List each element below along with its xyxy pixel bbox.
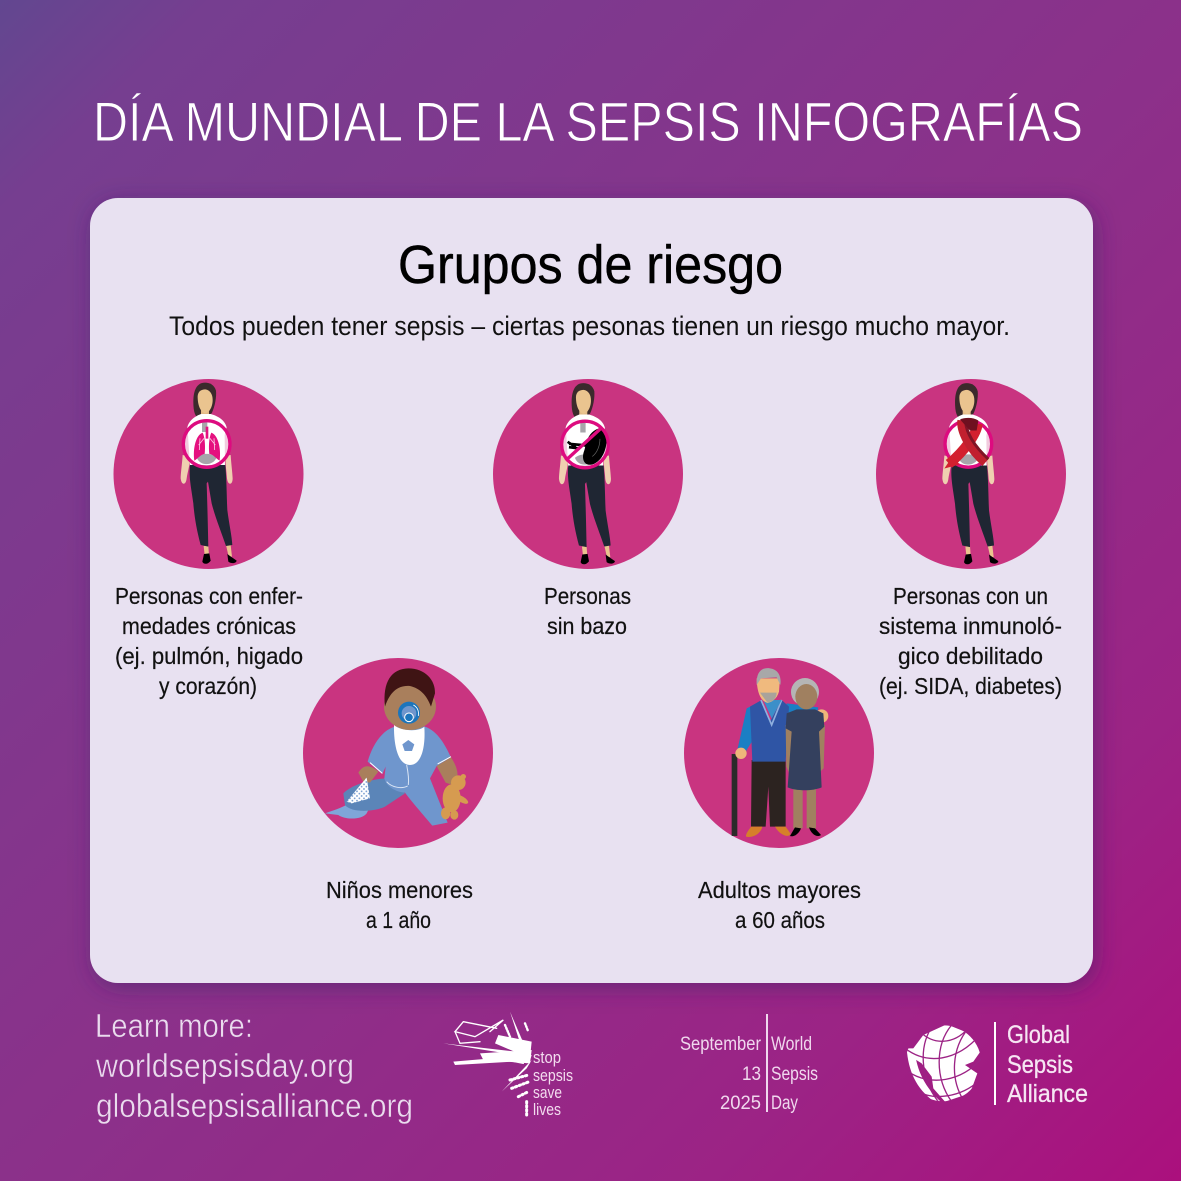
label: infants: [326, 877, 473, 933]
label: chronic disease: [115, 583, 303, 699]
group: older adults: [684, 658, 874, 848]
icon: globe: [905, 1024, 983, 1103]
label: chronic disease: (ej. pulmón, higado: [115, 643, 303, 669]
footer: learn more links: [95, 1007, 413, 1124]
group: weakened immune system: [876, 379, 1066, 569]
footer: learn more links: worldsepsisday.org: [95, 1047, 354, 1084]
label: older adults: [698, 877, 861, 933]
text: organization name: Alliance: [1007, 1080, 1088, 1108]
icon: splatter: [443, 1012, 532, 1115]
label: older adults: a 60 años: [735, 907, 825, 933]
subtitle: Todos pueden tener sepsis – ciertas pesonas tienen un riesgo mucho mayor.: [169, 311, 1010, 341]
label: no spleen: sin bazo: [547, 613, 627, 639]
logo: stop sepsis save lives: stop: [533, 1048, 561, 1067]
label: no spleen: [544, 583, 631, 639]
logo: Global Sepsis Alliance: [905, 1021, 1088, 1108]
heading: Grupos de riesgo: [398, 235, 783, 295]
label: older adults: Adultos mayores: [698, 877, 861, 903]
group: chronic disease: [114, 379, 304, 569]
label: weakened immune system: gico debilitado: [898, 643, 1043, 669]
group: no spleen: [493, 379, 683, 569]
logo: World Sepsis Day: Day: [771, 1093, 798, 1114]
label: infants: a 1 año: [366, 907, 431, 933]
logo: World Sepsis Day: [680, 1014, 818, 1114]
logo: World Sepsis Day: 13: [742, 1064, 761, 1085]
logo: World Sepsis Day: 2025: [720, 1093, 761, 1114]
label: weakened immune system: (ej. SIDA, diabetes): [879, 673, 1062, 699]
logo: World Sepsis Day: World: [771, 1034, 812, 1055]
text: organization name: Sepsis: [1007, 1051, 1073, 1079]
text: organization name: [1007, 1021, 1088, 1108]
label: infants: Niños menores: [326, 877, 473, 903]
label: chronic disease: medades crónicas: [122, 613, 296, 639]
logo: stop sepsis save lives: [443, 1012, 573, 1119]
label: weakened immune system: Personas con un: [893, 583, 1048, 609]
logo: stop sepsis save lives: save: [533, 1083, 562, 1102]
label: chronic disease: y corazón): [159, 673, 257, 699]
label: chronic disease: Personas con enfer-: [115, 583, 303, 609]
label: weakened immune system: [879, 583, 1062, 699]
text: organization name: Global: [1007, 1021, 1070, 1049]
group: infants: [303, 658, 493, 848]
teddy bear: [441, 774, 470, 820]
label: no spleen: Personas: [544, 583, 631, 609]
footer: learn more links: Learn more:: [95, 1007, 253, 1044]
logo: World Sepsis Day: Sepsis: [771, 1064, 818, 1085]
logo: stop sepsis save lives: lives: [533, 1100, 561, 1119]
logo: stop sepsis save lives: sepsis: [533, 1066, 573, 1085]
label: weakened immune system: sistema inmunoló-: [879, 613, 1062, 639]
logo: World Sepsis Day: September: [680, 1034, 762, 1055]
footer: learn more links: globalsepsisalliance.org: [96, 1087, 413, 1124]
panel: risk groups: [90, 198, 1093, 983]
